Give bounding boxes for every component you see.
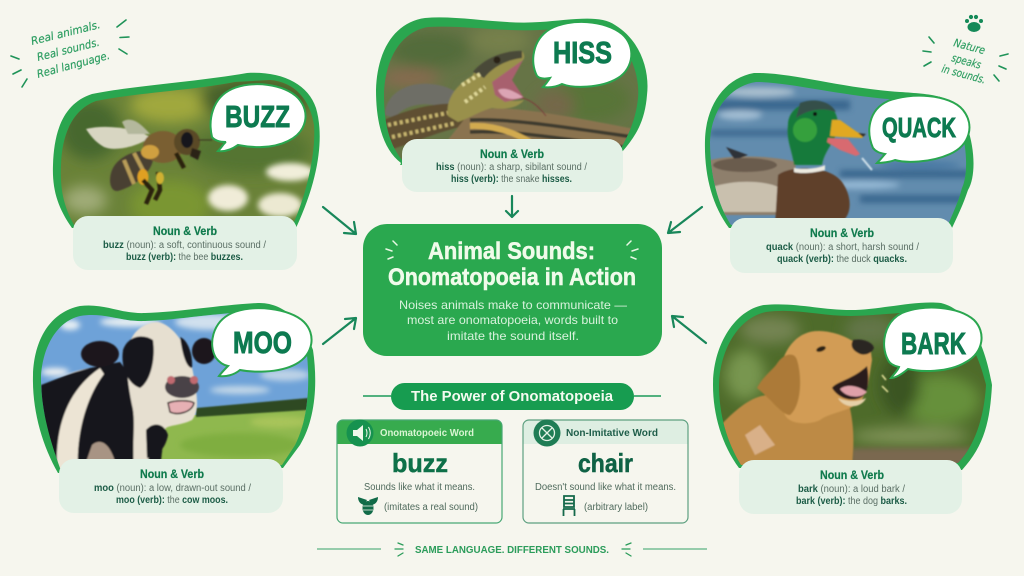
tagline: SAME LANGUAGE. DIFFERENT SOUNDS. (415, 544, 609, 556)
arrows to centre (323, 196, 706, 344)
subtitle: Noises animals make to communicate — (399, 298, 627, 312)
photo: snake (384, 26, 638, 160)
panel: hiss (375, 15, 655, 192)
caption: quack: quack (verb): the duck quacks. (777, 254, 907, 265)
caption: buzz: Noun & Verb (153, 224, 217, 238)
speech bubble: MOO (212, 308, 312, 376)
heading (388, 238, 636, 291)
speech bubble: BUZZ: BUZZ (225, 99, 290, 134)
note: nature speaks in sounds: in sounds. (940, 62, 987, 87)
subtitle: imitate the sound itself. (447, 329, 579, 343)
icon: paw print (965, 15, 983, 32)
photo: duck (710, 82, 966, 225)
caption: bark: bark (verb): the dog barks. (796, 496, 907, 507)
caption: bark (739, 460, 962, 514)
caption: bark: bark (noun): a loud bark / (798, 484, 905, 495)
caption: quack: quack (noun): a short, harsh sound / (766, 242, 919, 253)
heading: the power of onomatopoeia: The Power of Onomatopoeia (411, 388, 614, 405)
card: non-imitative word (523, 420, 688, 523)
note: real animals (11, 18, 129, 87)
speech bubble: QUACK: QUACK (882, 112, 956, 143)
caption: bark: Noun & Verb (820, 468, 884, 482)
caption: buzz: buzz (verb): the bee buzzes. (126, 252, 243, 263)
icon: speaker (346, 420, 374, 446)
caption: moo (59, 459, 283, 513)
panel: centre title (363, 224, 662, 356)
caption: quack (730, 218, 953, 273)
note: nature speaks in sounds (923, 15, 1008, 87)
subtitle: most are onomatopoeia, words built to (407, 313, 618, 327)
caption: hiss: hiss (verb): the snake hisses. (451, 174, 572, 185)
caption: buzz: buzz (noun): a soft, continuous sound / (103, 240, 266, 251)
note: real animals: Real sounds. (36, 36, 101, 64)
heading: Animal Sounds: (428, 238, 595, 265)
subtitle (399, 298, 627, 343)
speech bubble: HISS (533, 22, 631, 87)
caption: quack: Noun & Verb (810, 226, 874, 240)
card: onomatopoeic word: buzz (392, 448, 448, 478)
panel: quack (700, 70, 980, 273)
card: non-imitative word: (arbitrary label) (584, 502, 648, 513)
photo: cow (41, 313, 308, 468)
caption: buzz (73, 216, 297, 270)
note: real animals: Real animals. (30, 18, 102, 48)
speech bubble: QUACK (869, 96, 969, 163)
caption: moo: Noun & Verb (140, 467, 204, 481)
note: nature speaks in sounds: speaks (950, 51, 983, 72)
speech bubble: BUZZ (211, 84, 306, 151)
icon: crossed circle (534, 420, 560, 446)
speech bubble: MOO: MOO (233, 325, 292, 360)
heading: Onomatopoeia in Action (388, 264, 636, 291)
panel: buzz (50, 70, 330, 270)
heading: the power of onomatopoeia (363, 383, 661, 410)
caption: hiss: Noun & Verb (480, 147, 544, 161)
speech bubble: HISS: HISS (553, 35, 612, 70)
speech bubble: BARK: BARK (901, 326, 966, 361)
tagline (317, 543, 707, 556)
photo: dog (719, 310, 986, 465)
card: onomatopoeic word: Onomatopoeic Word (380, 427, 474, 439)
caption: moo: moo (verb): the cow moos. (116, 495, 228, 506)
icon: chair (563, 496, 575, 516)
panel: bark (710, 300, 1000, 514)
photo: bee (60, 80, 314, 225)
card: non-imitative word: Non-Imitative Word (566, 427, 658, 439)
card: non-imitative word: Doesn't sound like what it means. (535, 482, 676, 493)
card: onomatopoeic word (337, 420, 502, 523)
note: nature speaks in sounds: Nature (952, 36, 987, 57)
caption: hiss: hiss (noun): a sharp, sibilant sound / (436, 162, 587, 173)
card: non-imitative word: chair (578, 448, 633, 478)
card: onomatopoeic word: Sounds like what it means. (364, 482, 475, 493)
speech bubble: BARK (884, 308, 982, 378)
caption: moo: moo (noun): a low, drawn-out sound / (94, 483, 251, 494)
caption: hiss (402, 139, 623, 192)
icon: bee (358, 497, 378, 515)
card: onomatopoeic word: (imitates a real sound) (384, 502, 478, 513)
note: real animals: Real language. (35, 49, 111, 81)
panel: moo (30, 300, 320, 513)
